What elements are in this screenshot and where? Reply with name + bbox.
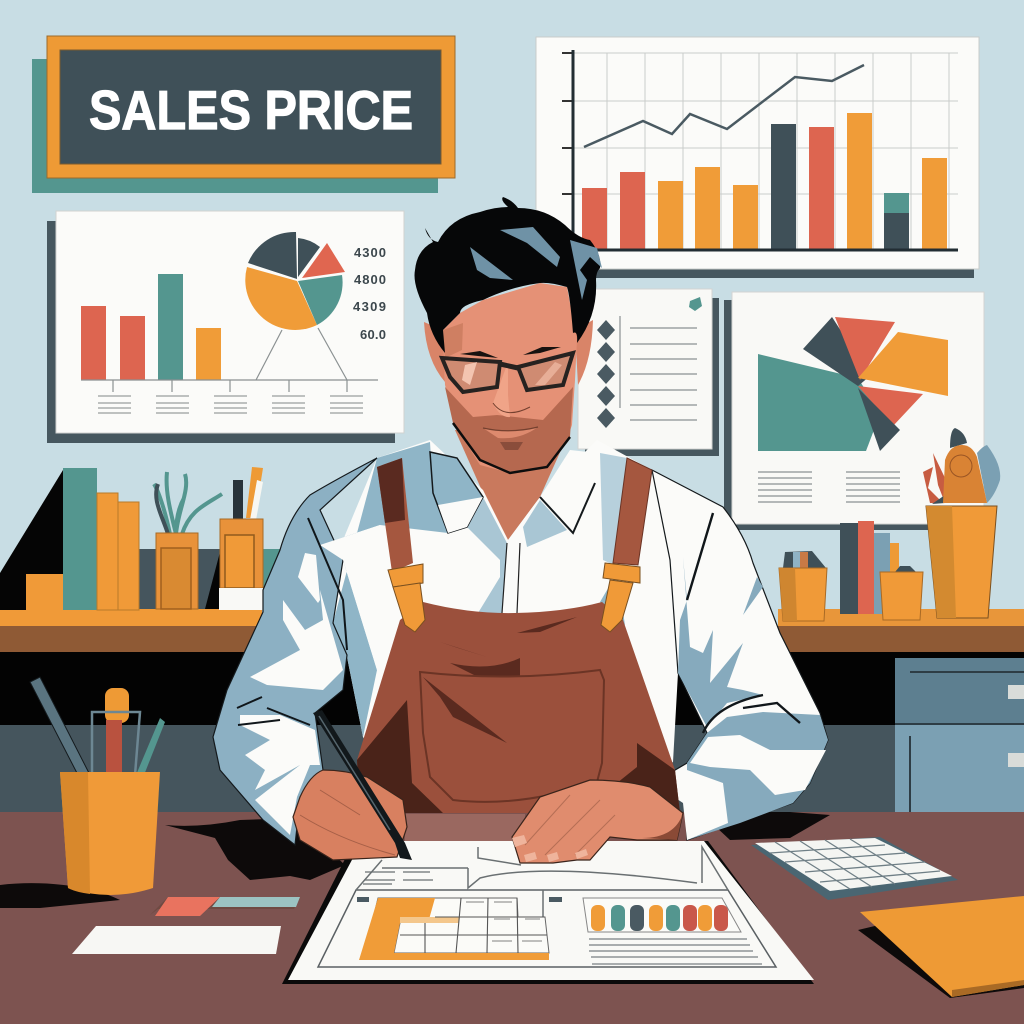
panel: combined bar and line chart bbox=[536, 37, 979, 278]
orange notebook bbox=[858, 896, 1024, 998]
lower wall band bbox=[0, 652, 1024, 813]
worksheet on desk bbox=[282, 841, 814, 984]
pen holder on shelf bbox=[205, 467, 263, 610]
right arm sleeve bbox=[652, 470, 828, 840]
panel: bar and pie chart bbox=[47, 211, 404, 443]
neck bbox=[455, 430, 570, 540]
axes bbox=[573, 50, 958, 250]
desk bbox=[0, 812, 1024, 1024]
tall tool cup bbox=[923, 428, 1000, 618]
apron buckles bbox=[388, 563, 640, 632]
worksheet color bars bbox=[583, 898, 741, 932]
hair bbox=[414, 197, 602, 353]
glasses bbox=[442, 353, 573, 392]
plant pot bbox=[154, 472, 222, 609]
panel: list note bbox=[578, 289, 719, 456]
trend line bbox=[584, 65, 864, 147]
ears bbox=[424, 320, 593, 385]
right shelf items bbox=[779, 521, 923, 621]
face bbox=[442, 283, 577, 473]
left arm sleeve bbox=[213, 458, 398, 845]
pie legend numbers: 4300 bbox=[354, 245, 386, 260]
file cabinet bbox=[895, 658, 1024, 813]
writing hand with pen bbox=[293, 710, 412, 860]
left shelf wall section bbox=[0, 549, 284, 652]
bars bbox=[582, 113, 947, 250]
resting hand bbox=[512, 780, 683, 863]
pie legend numbers: 4309 bbox=[353, 299, 386, 314]
desk cards bbox=[72, 897, 300, 954]
keyboard bbox=[751, 837, 958, 900]
shirt torso bbox=[320, 440, 678, 800]
pen cup bbox=[30, 677, 165, 895]
apron pocket bbox=[420, 670, 604, 802]
eyebrows bbox=[460, 347, 561, 358]
pie chart bbox=[245, 232, 345, 330]
pie legend numbers bbox=[353, 245, 386, 342]
apron bbox=[357, 458, 680, 813]
right shelf bbox=[778, 609, 1024, 652]
title sign bbox=[32, 36, 455, 193]
books left bbox=[0, 468, 139, 610]
wedge shapes bbox=[758, 317, 948, 451]
collar bbox=[430, 450, 597, 533]
apron straps bbox=[377, 458, 652, 572]
worksheet table bbox=[359, 898, 549, 960]
bars bbox=[81, 274, 221, 380]
pie legend numbers: 4800 bbox=[354, 272, 386, 287]
pie legend numbers: 60.0 bbox=[360, 327, 386, 342]
title text: SALES PRICE bbox=[89, 79, 413, 141]
person bbox=[213, 197, 828, 863]
panel: area and wedge chart bbox=[724, 292, 984, 530]
